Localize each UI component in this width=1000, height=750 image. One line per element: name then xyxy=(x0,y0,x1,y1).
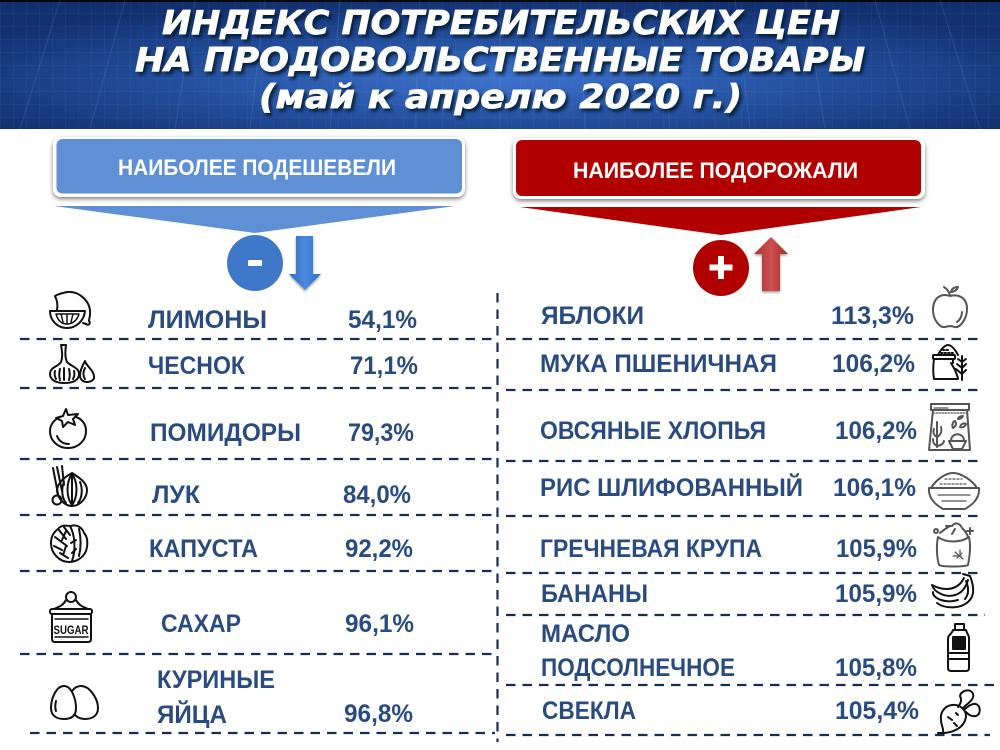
panel heading: more expensive: НАИБОЛЕЕ ПОДОРОЖАЛИ xyxy=(573,158,858,183)
row: eggs: ЯЙЦА xyxy=(157,699,227,729)
icon: onion xyxy=(52,466,87,506)
row: tomatoes: ПОМИДОРЫ xyxy=(150,419,301,447)
row: rice: РИС ШЛИФОВАННЫЙ xyxy=(540,472,803,502)
pointer: cheaper xyxy=(54,206,455,233)
row: sunflower oil: 105,8% xyxy=(835,654,917,682)
row: oat flakes xyxy=(540,417,917,445)
row: beet: 105,4% xyxy=(835,697,919,725)
row: wheat flour xyxy=(540,350,915,378)
row: cabbage xyxy=(149,535,413,563)
icon: sugar jar xyxy=(50,592,92,642)
icon: oat package xyxy=(929,404,970,450)
row: apples: 113,3% xyxy=(831,302,914,330)
icon: buckwheat sack xyxy=(934,524,973,566)
row: bananas: 105,9% xyxy=(835,580,917,608)
row: beet: СВЕКЛА xyxy=(542,697,636,725)
row: tomatoes xyxy=(150,419,414,447)
icon: cabbage xyxy=(51,525,87,562)
row: sunflower oil: ПОДСОЛНЕЧНОЕ xyxy=(541,654,735,682)
panel heading: cheaper xyxy=(53,137,465,197)
title: ИНДЕКС ПОТРЕБИТЕЛЬСКИХ ЦЕН xyxy=(162,3,840,42)
row: wheat flour: 106,2% xyxy=(832,350,915,378)
row: garlic xyxy=(148,352,418,380)
row: tomatoes: 79,3% xyxy=(348,419,414,447)
row: lemons: ЛИМОНЫ xyxy=(148,306,267,334)
row: buckwheat: 105,9% xyxy=(836,535,917,563)
row: cabbage: КАПУСТА xyxy=(149,535,258,563)
title: (май к апрелю 2020 г.) xyxy=(259,77,742,116)
row: sunflower oil: МАСЛО xyxy=(541,620,630,648)
row: rice xyxy=(540,472,916,502)
icon: bananas xyxy=(932,574,973,607)
row: onion: 84,0% xyxy=(343,481,411,509)
row: lemons: 54,1% xyxy=(348,306,417,334)
row: bananas: БАНАНЫ xyxy=(541,580,648,608)
header banner xyxy=(0,0,1000,129)
row: buckwheat: ГРЕЧНЕВАЯ КРУПА xyxy=(540,535,762,563)
row: sugar: САХАР xyxy=(161,610,241,638)
icon: eggs xyxy=(51,686,98,719)
row: oat flakes: ОВСЯНЫЕ ХЛОПЬЯ xyxy=(540,417,766,445)
row: sugar xyxy=(161,610,414,638)
row: garlic: 71,1% xyxy=(350,352,418,380)
icon: lemon xyxy=(50,292,90,328)
row: eggs: КУРИНЫЕ xyxy=(157,666,275,694)
row: eggs xyxy=(157,666,413,729)
arrow down xyxy=(289,236,321,290)
arrow up xyxy=(754,237,788,291)
row: onion: ЛУК xyxy=(152,481,201,509)
icon: tomato xyxy=(50,409,86,448)
plus badge xyxy=(693,240,749,296)
pointer: more expensive xyxy=(520,207,921,235)
row: oat flakes: 106,2% xyxy=(835,417,917,445)
row: lemons xyxy=(148,306,417,334)
row: sugar: 96,1% xyxy=(345,610,414,638)
title xyxy=(135,3,865,116)
row: garlic: ЧЕСНОК xyxy=(148,352,246,380)
row: wheat flour: МУКА ПШЕНИЧНАЯ xyxy=(540,350,777,378)
row: cabbage: 92,2% xyxy=(345,535,413,563)
list: more expensive xyxy=(540,302,919,725)
icon: rice bowl xyxy=(929,473,979,509)
icon: apple xyxy=(933,287,967,327)
icon: beet xyxy=(938,690,980,733)
list: cheaper xyxy=(148,306,418,729)
icon: flour bag xyxy=(933,345,966,380)
table dividers xyxy=(20,293,1000,742)
row: apples: ЯБЛОКИ xyxy=(541,302,644,330)
panel heading: cheaper: НАИБОЛЕЕ ПОДЕШЕВЕЛИ xyxy=(118,155,396,180)
panel heading: more expensive xyxy=(513,138,925,199)
title: НА ПРОДОВОЛЬСТВЕННЫЕ ТОВАРЫ xyxy=(135,40,865,79)
row: eggs: 96,8% xyxy=(344,700,413,728)
row: apples xyxy=(541,302,914,330)
row: sunflower oil xyxy=(541,620,917,682)
row: rice: 106,1% xyxy=(833,474,916,502)
icon: oil bottle xyxy=(948,624,969,671)
row: beet xyxy=(542,697,919,725)
row: onion xyxy=(152,481,411,509)
icon: garlic xyxy=(50,345,94,383)
row: buckwheat xyxy=(540,535,917,563)
minus badge xyxy=(227,235,283,291)
icon: sugar jar: SUGAR xyxy=(54,623,89,637)
row: bananas xyxy=(541,580,917,608)
